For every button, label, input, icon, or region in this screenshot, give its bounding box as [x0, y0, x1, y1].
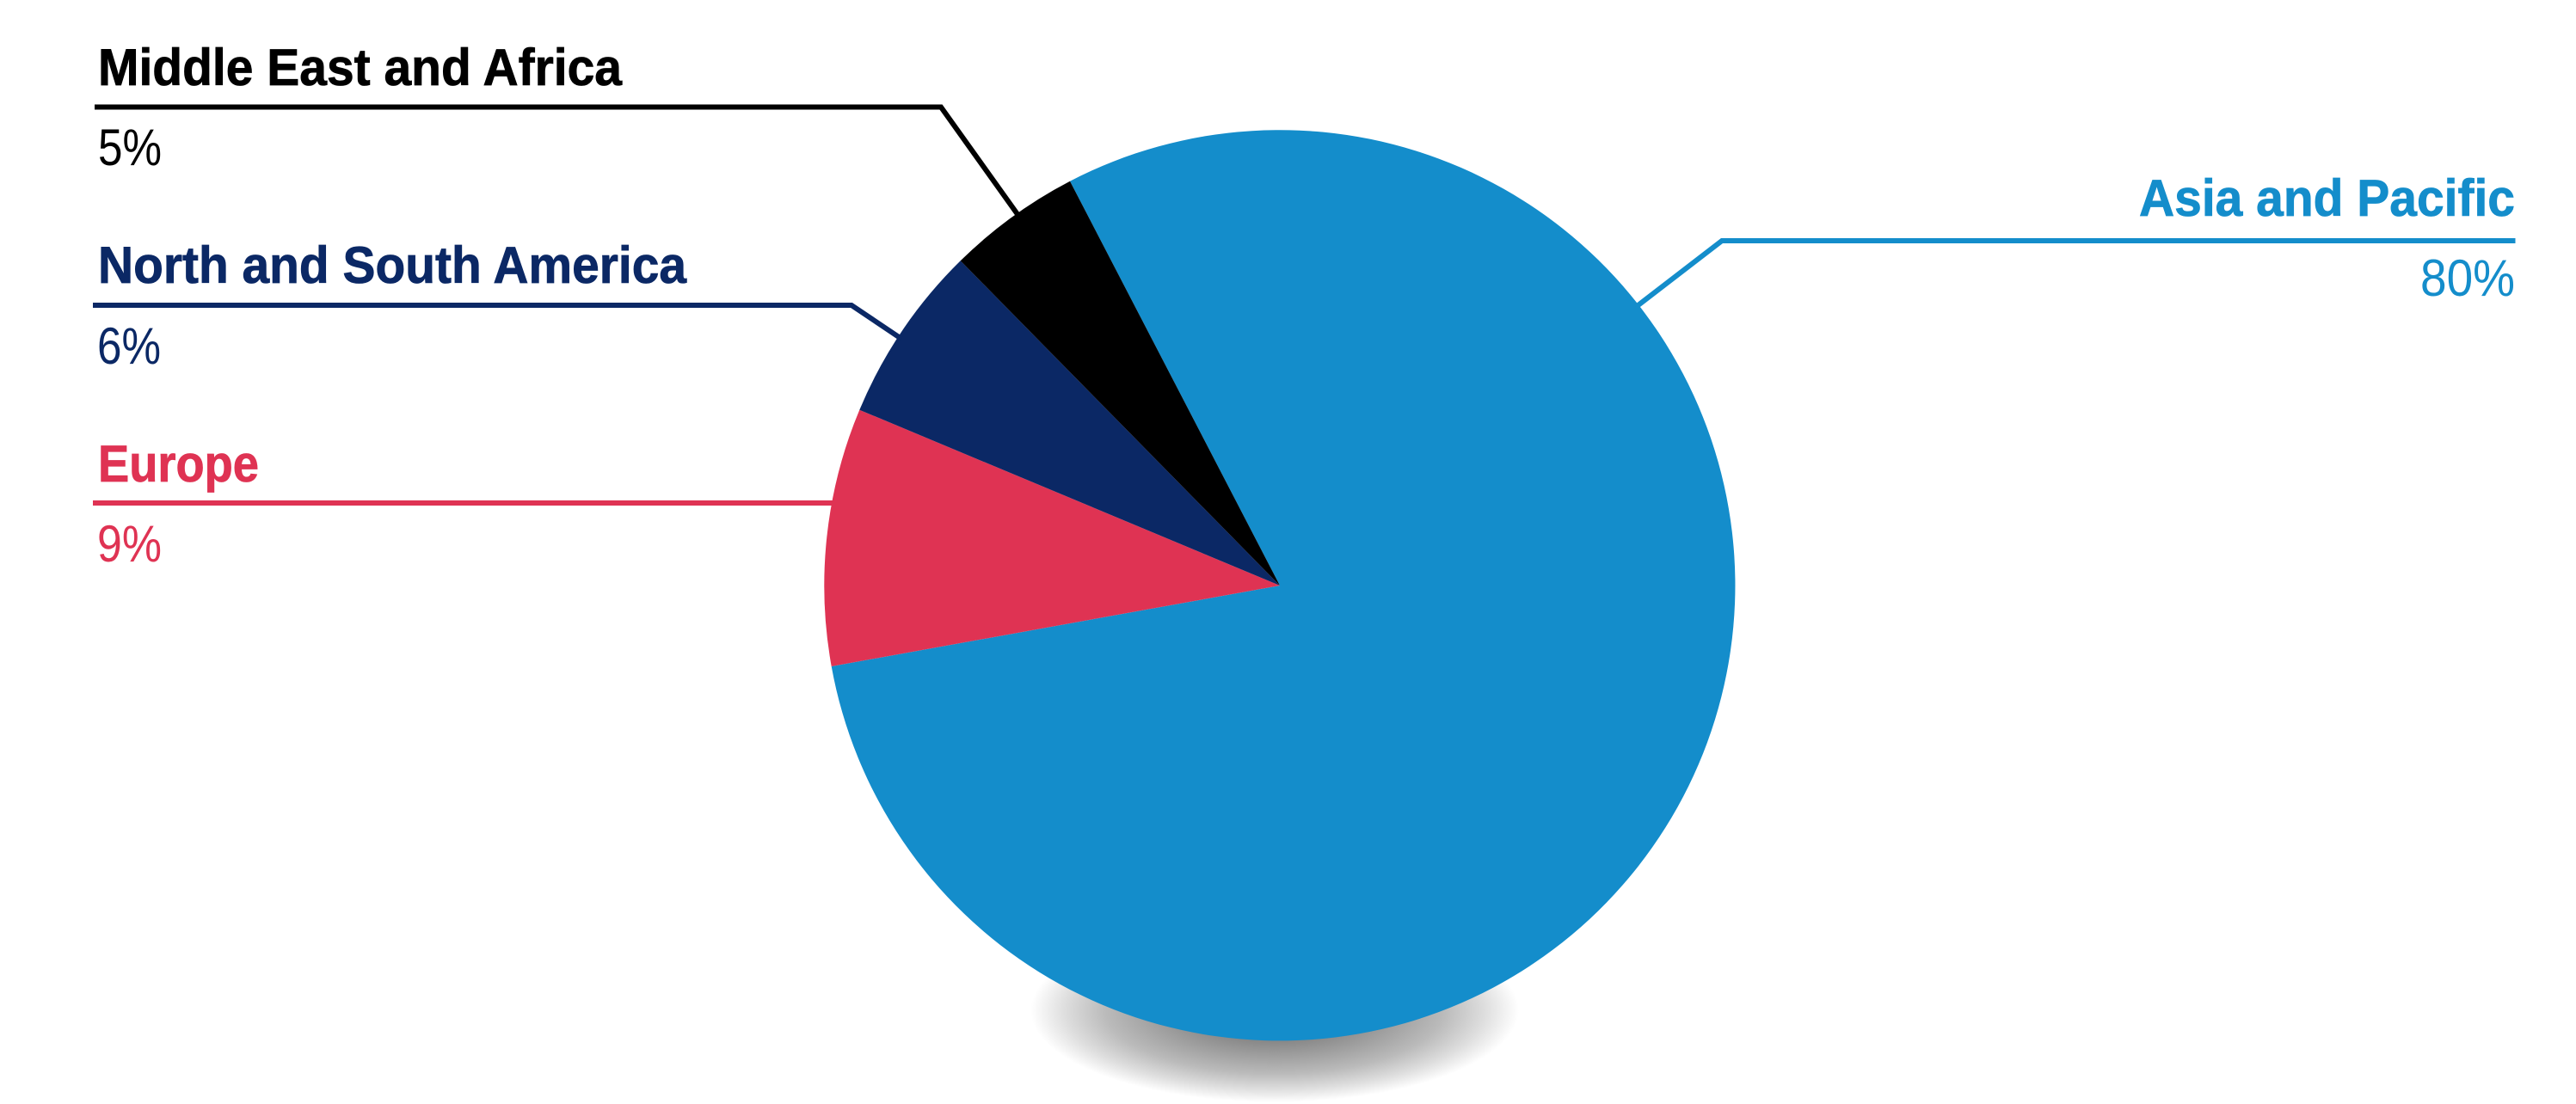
heading: North and South America: [98, 236, 687, 294]
value: 9%: [97, 515, 162, 573]
heading: Middle East and Africa: [98, 39, 623, 96]
slice: Asia and Pacific 80%: [832, 130, 1735, 1040]
callout: North and South America: [93, 236, 901, 375]
pie drop shadow: [1030, 918, 1519, 1102]
slice: Europe 9%: [824, 410, 1280, 666]
callout: Asia and Pacific: [1636, 169, 2515, 307]
value: 5%: [98, 119, 162, 176]
slice: North and South America 6%: [859, 261, 1280, 586]
slice: Middle East and Africa 5%: [961, 181, 1280, 586]
callout: Middle East and Africa: [95, 39, 1019, 217]
value: 80%: [2420, 249, 2515, 307]
leader line: [95, 107, 1019, 217]
leader line: [93, 500, 835, 506]
pie chart: [824, 130, 1735, 1040]
leader line: [1636, 241, 2515, 307]
callout: Europe: [93, 435, 835, 573]
heading: Europe: [98, 435, 259, 493]
leader line: [93, 305, 901, 339]
heading: Asia and Pacific: [2139, 169, 2515, 227]
value: 6%: [97, 317, 161, 375]
